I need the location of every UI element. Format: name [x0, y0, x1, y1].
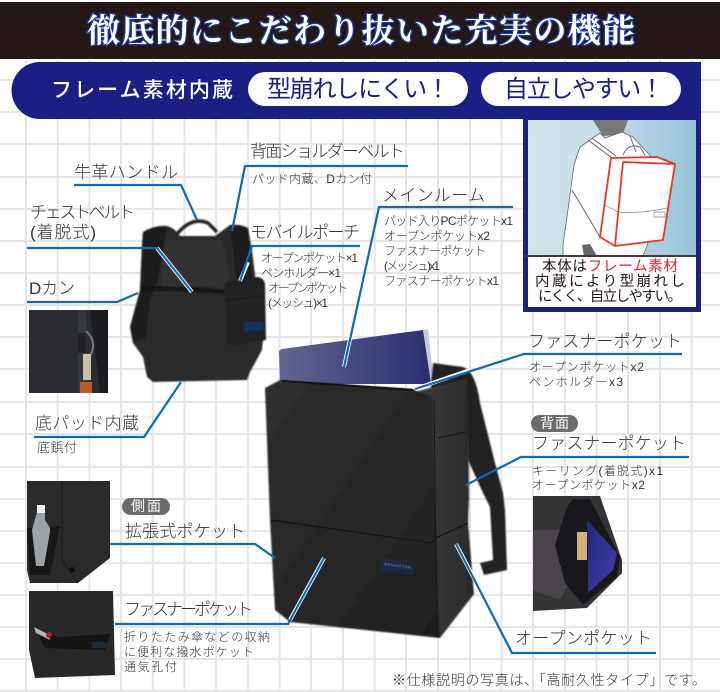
callout: leather handle	[74, 163, 197, 220]
callout: shoulder belt	[232, 142, 408, 231]
pill: stands on its own	[481, 72, 681, 106]
callout: leather handle: 牛革ハンドル	[74, 163, 178, 182]
callout: D-ring	[27, 279, 138, 302]
shoulder strap	[463, 367, 507, 575]
illustration caption	[535, 258, 685, 305]
callout: front zip pocket: 通気孔付	[124, 660, 177, 674]
callout: mobile pouch: オープンポケット	[268, 281, 348, 295]
callout: main room: ファスナーポケットx1	[384, 274, 499, 288]
callout: main room	[344, 186, 513, 367]
callout: chest belt: (着脱式)	[30, 223, 96, 242]
illustration: person wearing backpack	[563, 120, 675, 256]
photo: D-ring	[29, 310, 108, 393]
callout: mobile pouch	[240, 223, 360, 310]
callout: back zip pocket: オープンポケットx2	[532, 478, 645, 492]
callout: chest belt: チェストベルト	[30, 203, 135, 222]
footnote: ※仕様説明の写真は、「高耐久性タイプ」です。	[392, 672, 706, 688]
brand tag: MANHATTAN	[384, 561, 411, 570]
callout: back zip pocket: キーリング(着脱式)x1	[532, 464, 663, 478]
callout: shoulder belt: 背面ショルダーベルト	[250, 142, 405, 161]
callout: mobile pouch: オープンポケット×1	[261, 251, 358, 265]
photo: front zip pocket	[29, 591, 115, 678]
callout: shoulder belt: パッド内蔵、Dカン付	[252, 172, 372, 186]
front panel	[265, 380, 440, 638]
callout: back zip pocket	[466, 415, 689, 492]
photo: side expandable pocket	[27, 481, 110, 583]
callout: bottom pad: 底鋲付	[37, 440, 77, 455]
callout: side expandable pocket: 拡張式ポケット	[125, 522, 245, 541]
callout: open pocket: オープンポケット	[515, 629, 652, 648]
small backpack: back view	[130, 221, 266, 382]
callout: side expandable pocket	[110, 498, 275, 558]
brand tag	[379, 558, 416, 575]
callout: top zip pocket	[415, 332, 682, 389]
callout: front zip pocket: ファスナーポケット	[124, 600, 253, 619]
callout: top zip pocket: ペンホルダーx3	[529, 375, 623, 389]
red frame outline	[600, 157, 675, 246]
callout: open pocket	[456, 544, 656, 653]
illustration caption: にくく、自立しやすい。	[538, 288, 682, 305]
callout: bottom pad	[34, 382, 181, 455]
pill: stands on its own: 自立しやすい！	[504, 76, 664, 103]
callout: main room: ファスナーポケット	[384, 244, 486, 258]
callout: main room: オープンポケットx2	[384, 229, 490, 243]
callout: D-ring: Dカン	[29, 279, 75, 298]
badge: side: 側面	[131, 498, 161, 514]
badge: back: 背面	[540, 415, 569, 431]
banner: frame material	[12, 62, 701, 119]
callout: mobile pouch: ペンホルダー×1	[261, 266, 341, 280]
illustration caption: 本体はフレーム素材	[542, 258, 678, 275]
callout: top zip pocket: オープンポケットx2	[529, 360, 644, 374]
callout: back zip pocket: ファスナーポケット	[532, 434, 686, 453]
callout: front zip pocket	[115, 558, 324, 674]
callout: main room: (メッシュ)x1	[384, 259, 440, 273]
pill: keeps shape	[248, 72, 468, 106]
callout: main room: メインルーム	[382, 186, 485, 205]
callout: chest belt	[27, 203, 192, 292]
main backpack with laptop	[265, 329, 507, 638]
callout: front zip pocket: に便利な撥水ポケット	[124, 645, 254, 659]
title: 徹底的にこだわり抜いた充実の機能	[87, 13, 635, 50]
photo: back pocket	[533, 496, 622, 611]
callout: main room: パッド入りPCポケットx1	[384, 214, 513, 228]
banner heading: フレーム素材内蔵	[51, 79, 233, 102]
illustration caption: 内蔵により型崩れし	[535, 273, 685, 290]
callout: mobile pouch: (メッシュ)×1	[268, 296, 328, 310]
laptop	[279, 330, 433, 384]
callout: bottom pad: 底パッド内蔵	[35, 414, 139, 433]
mobile pouch	[224, 277, 266, 346]
panel: frame illustration	[523, 115, 701, 312]
callout: front zip pocket: 折りたたみ傘などの収納	[124, 630, 270, 644]
badge: back	[531, 415, 578, 432]
bag body	[265, 363, 474, 638]
badge: side	[122, 498, 170, 515]
callout: mobile pouch: モバイルポーチ	[250, 223, 360, 242]
header bar with title	[0, 2, 720, 59]
callout: top zip pocket: ファスナーポケット	[528, 332, 682, 351]
back top	[430, 363, 470, 397]
side panel	[415, 378, 474, 638]
pill: keeps shape: 型崩れしにくい！	[267, 76, 450, 103]
